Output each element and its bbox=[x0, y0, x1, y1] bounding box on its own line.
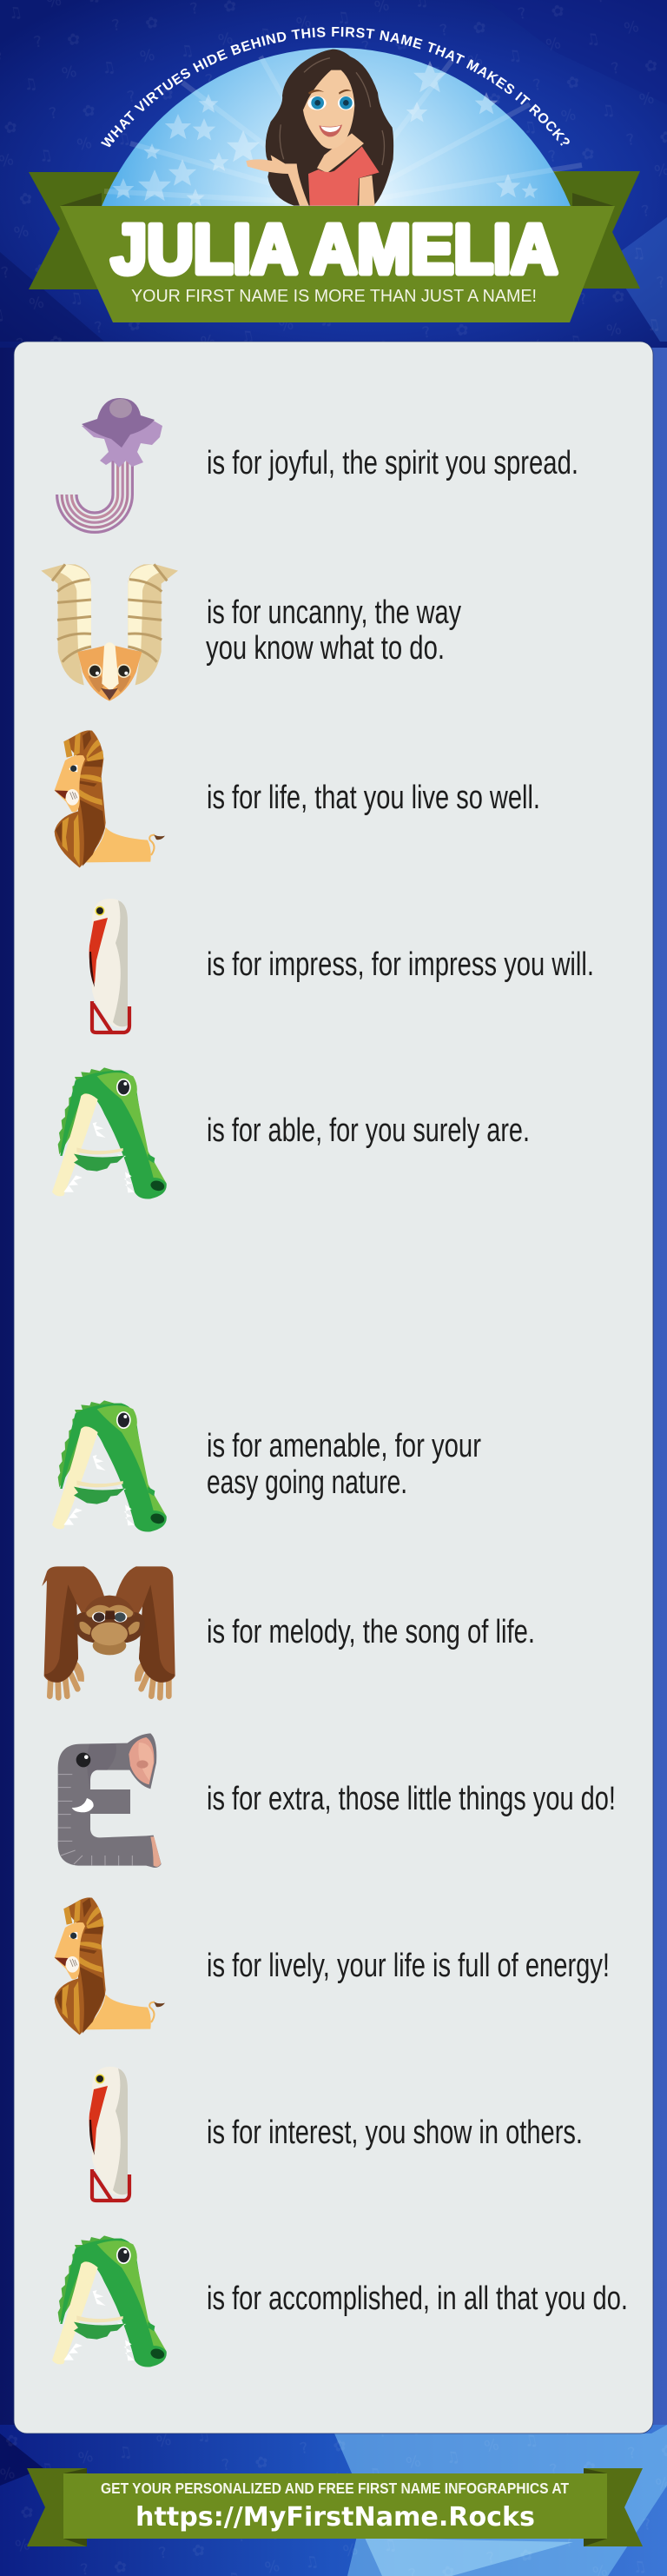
text bbox=[207, 1428, 481, 1501]
row: I second name bbox=[89, 2067, 583, 2201]
header banner back tails bbox=[29, 171, 640, 289]
main card panel bbox=[14, 342, 653, 2433]
text bbox=[206, 594, 461, 667]
text: is for able, for you surely are. bbox=[207, 1112, 530, 1149]
icon: ram-horned U bbox=[41, 564, 178, 701]
icon: lion L bbox=[55, 1897, 165, 2035]
row: L bbox=[55, 730, 540, 867]
text: easy going nature. bbox=[207, 1464, 407, 1501]
text: is for uncanny, the way bbox=[207, 594, 461, 631]
icon: crocodile A bbox=[52, 1067, 167, 1198]
row: E bbox=[58, 1733, 616, 1868]
icon: elephant E bbox=[58, 1733, 162, 1868]
icon: lion L bbox=[55, 730, 165, 867]
icon: crocodile A bbox=[52, 2235, 167, 2367]
title: JULIA AMELIA bbox=[111, 210, 558, 288]
footer line one: GET YOUR PERSONALIZED AND FREE FIRST NAME INFOGRAPHICS AT bbox=[101, 2480, 569, 2497]
row: J bbox=[57, 398, 578, 532]
text: you know what to do. bbox=[206, 630, 445, 667]
icon: stork I bbox=[89, 899, 129, 1032]
footer url: https://MyFirstName.Rocks bbox=[135, 2502, 535, 2533]
row: A bbox=[52, 1067, 530, 1198]
row: M bbox=[42, 1566, 535, 1697]
row: U bbox=[41, 564, 461, 701]
row: A second name bbox=[52, 1400, 481, 1531]
arched tagline: WHAT VIRTUES HIDE BEHIND THIS FIRST NAME THAT MAKES IT ROCK? bbox=[101, 27, 570, 148]
icon: ape M bbox=[42, 1566, 175, 1697]
footer banner bbox=[27, 2468, 643, 2546]
icon: jellyfish J bbox=[57, 398, 162, 532]
row: A third bbox=[52, 2235, 628, 2367]
text: is for melody, the song of life. bbox=[207, 1614, 535, 1650]
row: L second name bbox=[55, 1897, 610, 2035]
header banner front bbox=[60, 193, 615, 322]
icon: crocodile A bbox=[52, 1400, 167, 1531]
sunburst dome with stars bbox=[102, 48, 582, 206]
subtitle: YOUR FIRST NAME IS MORE THAN JUST A NAME! bbox=[131, 286, 537, 306]
text: is for amenable, for your bbox=[207, 1428, 481, 1464]
illustration: woman with dark hair and red top bbox=[246, 50, 393, 206]
text: is for life, that you live so well. bbox=[207, 780, 540, 816]
row: I bbox=[89, 899, 594, 1032]
icon: stork I bbox=[89, 2067, 129, 2201]
